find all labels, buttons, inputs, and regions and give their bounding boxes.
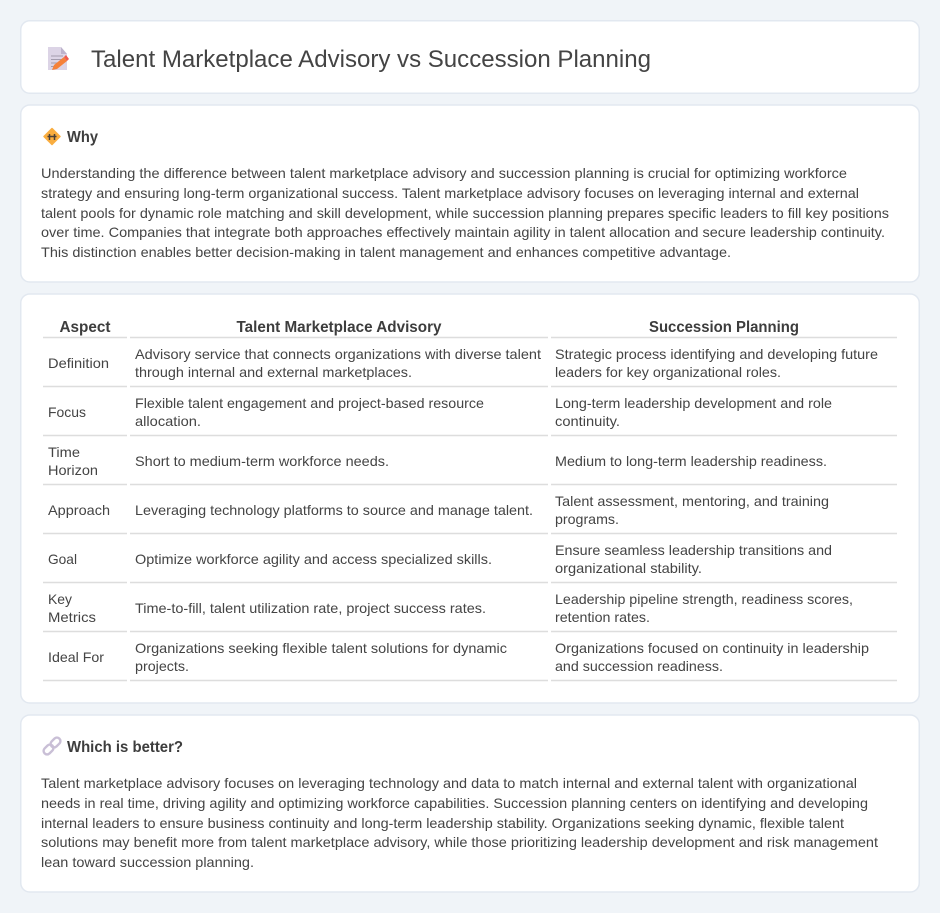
row: time horizon: Short to medium-term workforce needs. xyxy=(135,453,389,469)
row: focus: Long-term leadership development and role xyxy=(555,395,832,411)
row: definition: through internal and external marketplaces. xyxy=(135,364,412,380)
which is better paragraph: lean toward succession planning. xyxy=(41,854,254,870)
row: goal: organizational stability. xyxy=(555,560,702,576)
which is better paragraph xyxy=(41,775,878,870)
row: definition: Definition xyxy=(48,355,109,371)
row: approach: Approach xyxy=(48,502,110,518)
heading: why: Why xyxy=(67,129,98,146)
row: key metrics: Time-to-fill, talent utilization rate, project success rates. xyxy=(135,600,486,616)
table header xyxy=(60,319,799,336)
row: time horizon: Medium to long-term leadership readiness. xyxy=(555,453,827,469)
row: key metrics: Metrics xyxy=(48,609,96,625)
table header: Aspect xyxy=(60,319,111,336)
icon: orange diamond sign xyxy=(44,128,60,144)
icon: document with pencil xyxy=(48,47,69,70)
row: definition: Advisory service that connects organizations with diverse talent xyxy=(135,346,541,362)
why paragraph: This distinction enables better decision-making in talent management and enhances competitive advantage. xyxy=(41,244,731,260)
row: time horizon xyxy=(48,444,827,478)
row: ideal for xyxy=(48,640,869,674)
row: definition xyxy=(48,346,878,380)
row: focus: continuity. xyxy=(555,413,620,429)
row: time horizon: Horizon xyxy=(48,462,98,478)
icon: chain link xyxy=(42,736,62,756)
table header: Talent Marketplace Advisory xyxy=(236,319,442,336)
row: ideal for: projects. xyxy=(135,658,189,674)
why paragraph: talent pools for dynamic role matching and skill development, while succession planning prepares specific leaders to fill key positions xyxy=(41,205,889,221)
row: goal: Ensure seamless leadership transitions and xyxy=(555,542,832,558)
row: focus: Focus xyxy=(48,404,86,420)
panel: title header xyxy=(21,21,919,93)
why paragraph xyxy=(41,165,889,260)
why paragraph: Understanding the difference between talent marketplace advisory and succession planning is crucial for optimizing workforce xyxy=(41,165,847,181)
row: approach xyxy=(48,493,829,527)
row: ideal for: Organizations focused on continuity in leadership xyxy=(555,640,869,656)
row: approach: Leveraging technology platforms to source and manage talent. xyxy=(135,502,533,518)
row: goal: Optimize workforce agility and access specialized skills. xyxy=(135,551,492,567)
why paragraph: over time. Companies that integrate both approaches effectively maintain agility in talent allocation and secure leadership continuity. xyxy=(41,224,885,240)
which is better paragraph: Talent marketplace advisory focuses on leveraging technology and data to match internal and external talent with organizational xyxy=(41,775,857,791)
which is better paragraph: solutions may benefit more from talent marketplace advisory, while those prioritizing leadership development and risk management xyxy=(41,834,878,850)
row: focus: allocation. xyxy=(135,413,201,429)
row: ideal for: and succession readiness. xyxy=(555,658,723,674)
why paragraph: strategy and ensuring long-term organizational success. Talent marketplace advisory focuses on leveraging internal and external xyxy=(41,185,859,201)
row: approach: programs. xyxy=(555,511,619,527)
row: key metrics: Key xyxy=(48,591,72,607)
row: approach: Talent assessment, mentoring, and training xyxy=(555,493,829,509)
panel: comparison table xyxy=(21,294,919,703)
title text: Talent Marketplace Advisory vs Succession Planning xyxy=(91,46,651,73)
row: key metrics: retention rates. xyxy=(555,609,650,625)
row: ideal for: Organizations seeking flexible talent solutions for dynamic xyxy=(135,640,507,656)
row: key metrics: Leadership pipeline strength, readiness scores, xyxy=(555,591,853,607)
row: focus: Flexible talent engagement and project-based resource xyxy=(135,395,484,411)
row: definition: Strategic process identifying and developing future xyxy=(555,346,878,362)
row: goal: Goal xyxy=(48,551,77,567)
which is better paragraph: internal leaders to ensure business continuity and long-term leadership stability. Organizations seeking dynamic, flexible talent xyxy=(41,815,844,831)
row: key metrics xyxy=(48,591,853,625)
table header: Succession Planning xyxy=(649,319,799,336)
row: ideal for: Ideal For xyxy=(48,649,104,665)
row: time horizon: Time xyxy=(48,444,80,460)
row: goal xyxy=(48,542,832,576)
which is better paragraph: needs in real time, driving agility and optimizing workforce capabilities. Succession planning centers on identifying and developing xyxy=(41,795,868,811)
row: definition: leaders for key organizational roles. xyxy=(555,364,781,380)
panel: which is better xyxy=(21,715,919,892)
row: focus xyxy=(48,395,832,429)
heading: which is better: Which is better? xyxy=(67,739,183,756)
panel: why xyxy=(21,105,919,282)
